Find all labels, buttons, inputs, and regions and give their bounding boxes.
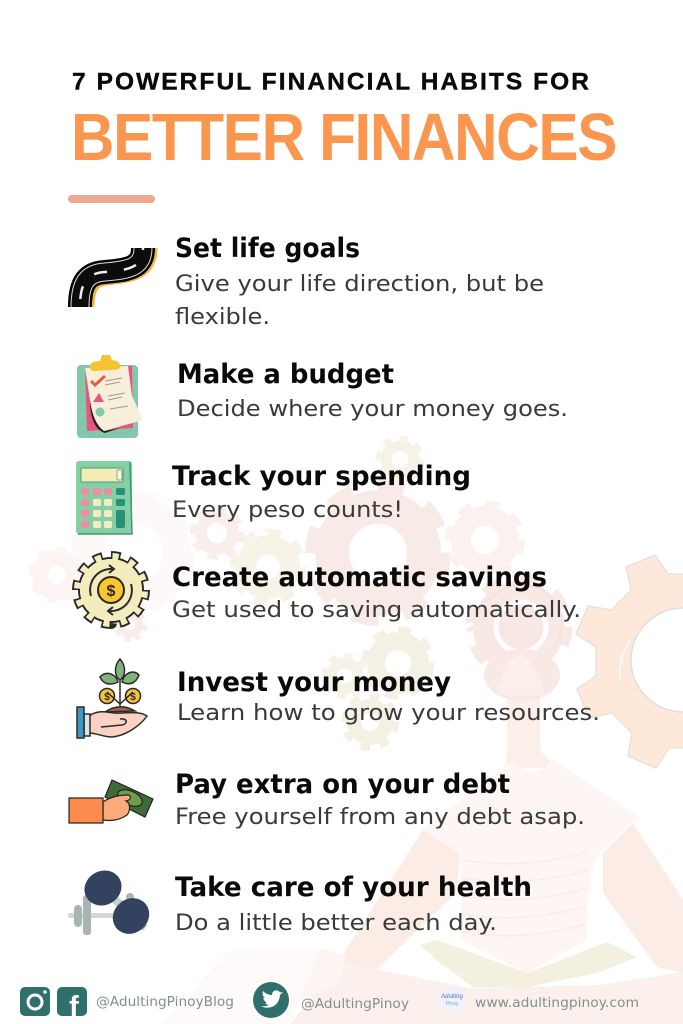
neck (505, 695, 560, 768)
facebook and instagram handle: @AdultingPinoyBlog (96, 995, 234, 1010)
item 2: make a budget (77, 355, 568, 438)
item 7: take care of your health (68, 864, 532, 941)
title (71, 68, 616, 175)
floor sheet (160, 948, 320, 1024)
description: Learn how to grow your resources. (177, 700, 600, 726)
description: Give your life direction, but be (175, 271, 544, 297)
arms (338, 830, 460, 973)
icon: twitter (253, 982, 289, 1018)
item 5: invest your money (77, 659, 600, 738)
heading: Invest your money (177, 667, 451, 698)
twitter handle: @AdultingPinoy (301, 997, 409, 1012)
description: Decide where your money goes. (177, 396, 568, 422)
icon: clipboard (77, 355, 143, 438)
icon: gear with coin (78, 557, 144, 623)
website: www.adultingpinoy.com (475, 996, 639, 1011)
footer: social handles (20, 982, 639, 1023)
icon: dumbbells (68, 864, 156, 941)
head (484, 649, 560, 701)
shirt (423, 760, 638, 973)
description: Get used to saving automatically. (172, 597, 581, 623)
heading: Set life goals (175, 233, 360, 264)
heading: Track your spending (172, 461, 471, 492)
heading: Create automatic savings (172, 562, 547, 593)
icon: blog logo (438, 986, 466, 1014)
accent divider (68, 195, 155, 203)
item 1: set life goals (80, 233, 544, 330)
icon: hand with plant (77, 659, 147, 738)
icon: instagram (20, 987, 50, 1016)
icon: hand with cash (69, 780, 153, 823)
description line 2: flexible. (175, 304, 270, 330)
cushion (420, 940, 637, 987)
title line 1: 7 POWERFUL FINANCIAL HABITS FOR (72, 68, 589, 96)
background gears (31, 438, 568, 748)
item 4: create automatic savings (78, 557, 581, 623)
item 6: pay extra on your debt (69, 769, 585, 830)
heading: Pay extra on your debt (175, 769, 510, 800)
icon: gear with coin: $ (107, 583, 116, 600)
description: Free yourself from any debt asap. (175, 804, 585, 830)
icon: calculator (76, 461, 132, 534)
description: Do a little better each day. (175, 910, 497, 936)
icon: blog logo: Pinoy (446, 1001, 459, 1007)
big orange gear (576, 554, 683, 768)
legs (290, 962, 683, 1024)
meditating woman figure (160, 649, 683, 1024)
title line 2: BETTER FINANCES (71, 100, 616, 175)
icon: blog logo: Adulting (440, 994, 464, 1000)
icon: road (80, 248, 146, 307)
item 3: track your spending (76, 461, 471, 534)
icon: facebook (57, 987, 87, 1023)
icon: hand with plant: $ (130, 692, 136, 703)
description: Every peso counts! (172, 497, 403, 523)
icon: facebook: f (69, 991, 79, 1023)
icon: hand with plant: $ (104, 692, 110, 703)
background illustration: gears and meditating woman (31, 438, 683, 1024)
heading: Take care of your health (175, 872, 532, 903)
heading: Make a budget (177, 359, 394, 390)
